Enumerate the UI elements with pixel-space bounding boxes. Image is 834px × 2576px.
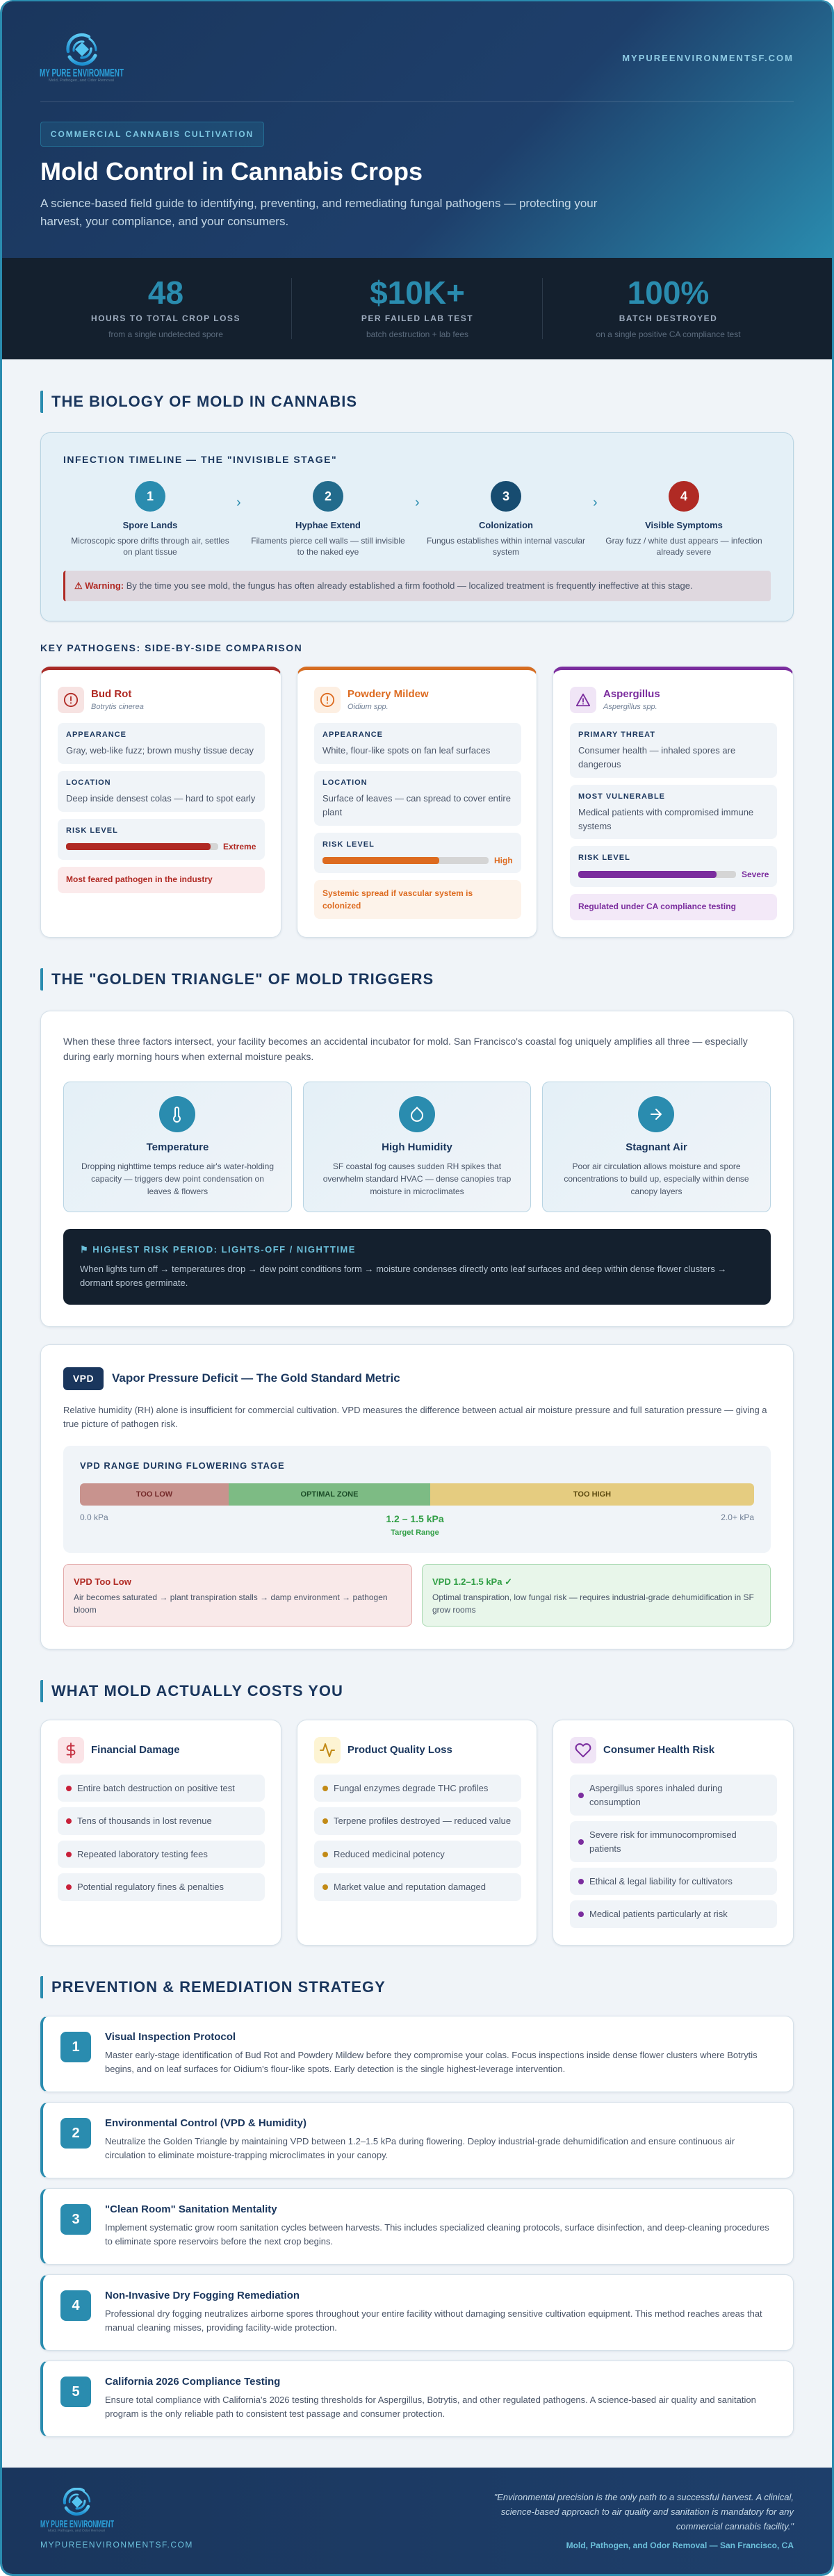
stat: $10K+: batch destruction + lab fees (366, 329, 468, 339)
range bar (80, 1483, 754, 1506)
panel: consumer health risk: Consumer Health Risk (603, 1744, 714, 1756)
vpd chart: VPD RANGE DURING FLOWERING STAGE (80, 1460, 285, 1471)
panel: financial damage: Financial Damage (91, 1744, 180, 1756)
callout: highest risk period: When lights turn off → temperatures drop → dew point conditions form → moisture condenses directly onto leaf surfaces and deep within dense flower clusters → (80, 1264, 726, 1274)
panel: financial damage: Repeated laboratory testing fees (77, 1849, 208, 1859)
step 3: system (493, 547, 519, 557)
trigger: stagnant air: Stagnant Air (626, 1141, 687, 1153)
trigger: humidity: High Humidity (382, 1141, 452, 1153)
list (570, 1775, 777, 1816)
stat: 100%: 100% (628, 275, 709, 311)
list: Aspergillus spores inhaled during (589, 1783, 723, 1793)
stat: $10K+: $10K+ (370, 275, 465, 311)
warning callout (63, 571, 771, 601)
risk level: RISK LEVEL (66, 826, 118, 835)
panel: infection timeline (40, 432, 794, 621)
icon: water drop (399, 1096, 435, 1132)
callout (58, 867, 265, 893)
icon: alert circle (314, 687, 341, 713)
step 1 (71, 481, 229, 557)
panel: golden triangle (40, 1011, 794, 1327)
risk level (314, 833, 521, 873)
strategy step 1: Master early-stage identification of Bud Rot and Powdery Mildew before they compromise your colas. Focus inspections inside dense flower clusters where Botrytis (105, 2050, 758, 2060)
trigger: temperature: Temperature (147, 1141, 208, 1153)
step 4: 4 (680, 489, 687, 503)
step 4: already severe (657, 547, 711, 557)
icon: activity (314, 1737, 341, 1763)
step 2: 2 (325, 489, 332, 503)
risk level: High (494, 856, 513, 865)
footer quote (494, 2492, 794, 2532)
heading: prevention: PREVENTION & REMEDIATION STRATEGY (51, 1978, 386, 1996)
strategy step 3: 3 (72, 2212, 80, 2227)
primary threat: dangerous (578, 759, 621, 769)
heading: golden triangle (40, 968, 596, 991)
logo (40, 33, 124, 83)
trigger: stagnant air: concentrations to build up, especially within dense (564, 1174, 749, 1184)
stat: $10K+ (361, 275, 473, 339)
icon: heart (570, 1737, 596, 1763)
range bar: OPTIMAL ZONE (301, 1490, 358, 1499)
callout: Regulated under CA compliance testing (578, 902, 736, 911)
icon: arrow (638, 1096, 674, 1132)
panel: consumer health risk: patients (589, 1843, 621, 1853)
step 2: to the naked eye (297, 547, 359, 557)
logo: Mold, Pathogen, and Odor Removal (49, 79, 114, 83)
trigger: temperature: capacity — triggers dew point condensation on (91, 1174, 264, 1184)
icon: dollar (58, 1737, 84, 1763)
step 4 (605, 481, 762, 557)
box: vpd optimal (422, 1564, 771, 1627)
intro text: When these three factors intersect, your facility becomes an accidental incubator for mold. San Francisco's coastal fog uniquely amplifies all three — especially (63, 1036, 748, 1047)
strategy step 5: program is the only reliable path to consistent test passage and consumer protection. (105, 2408, 445, 2419)
heading: biology (40, 391, 596, 413)
list (58, 1775, 265, 1802)
vpd chart: 1.2 – 1.5 kPa (386, 1513, 444, 1524)
risk level: RISK LEVEL (578, 854, 630, 862)
heading: costs (40, 1680, 596, 1702)
trigger: temperature: leaves & flowers (147, 1187, 208, 1196)
intro text (63, 1036, 748, 1062)
strategy step 1: Visual Inspection Protocol (105, 2031, 236, 2043)
step 1: Microscopic spore drifts through air, settles (71, 536, 229, 546)
strategy step 2: Neutralize the Golden Triangle by maintaining VPD between 1.2–1.5 kPa during flowering. Deploy industrial-grade dehumidification and ensure continuous air (105, 2136, 735, 2146)
strategy step 2: circulation to eliminate moisture-trapping microclimates in your canopy. (105, 2150, 388, 2160)
strategy step 3 (40, 2188, 794, 2265)
trigger: humidity: overwhelm standard HVAC — dense canopies trap (323, 1174, 511, 1184)
warning callout: ⚠ Warning: By the time you see mold, the fungus has often already established a firm foothold — localized treatment is frequently ineffective at this stage. (74, 580, 693, 591)
step 4: Gray fuzz / white dust appears — infection (605, 536, 762, 546)
heading: prevention (40, 1976, 596, 1998)
primary threat: Consumer health — inhaled spores are (578, 745, 735, 756)
risk level: Severe (742, 870, 769, 879)
vpd intro: true picture of pathogen risk. (63, 1419, 178, 1429)
stat: 100%: BATCH DESTROYED (619, 313, 717, 323)
panel: product quality loss (297, 1720, 537, 1946)
panel: bud rot (40, 667, 281, 938)
trigger: stagnant air (542, 1082, 771, 1212)
heading: costs: WHAT MOLD ACTUALLY COSTS YOU (51, 1682, 343, 1699)
panel: financial damage: Tens of thousands in lost revenue (77, 1816, 212, 1826)
arrow: › (236, 495, 241, 510)
risk level (58, 819, 265, 860)
risk level (570, 846, 777, 887)
panel: product quality loss: Product Quality Loss (348, 1744, 452, 1756)
strategy step 4 (40, 2274, 794, 2351)
location: plant (322, 806, 342, 817)
range bar: TOO LOW (136, 1490, 172, 1499)
most vulnerable: MOST VULNERABLE (578, 792, 665, 801)
footer quote: "Environmental precision is the only path to a successful harvest. A clinical, (494, 2492, 794, 2502)
name: Aspergillus (603, 688, 660, 700)
strategy step 4: Professional dry fogging neutralizes airborne spores throughout your entire facility without damaging sensitive cultivation equipment. This method reaches areas that (105, 2308, 762, 2319)
list: consumption (589, 1796, 641, 1807)
vpd chart (63, 1446, 771, 1553)
trigger: humidity: SF coastal fog causes sudden RH spikes that (333, 1161, 501, 1171)
step 4: Visible Symptoms (645, 520, 723, 530)
strategy step 2: 2 (72, 2126, 80, 2141)
strategy step 3: "Clean Room" Sanitation Mentality (105, 2203, 277, 2215)
panel: consumer health risk: Ethical & legal liability for cultivators (589, 1876, 733, 1886)
step 3: Fungus establishes within internal vascular (427, 536, 585, 546)
vpd title: Vapor Pressure Deficit — The Gold Standard Metric (112, 1371, 400, 1385)
appearance (58, 723, 265, 764)
box: vpd too low: VPD Too Low (74, 1576, 131, 1587)
appearance: APPEARANCE (322, 731, 383, 739)
panel: consumer health risk (553, 1720, 794, 1946)
panel: product quality loss: Terpene profiles destroyed — reduced value (334, 1816, 511, 1826)
location (314, 771, 521, 826)
subtitle: A science-based field guide to identifying, preventing, and remediating fungal pathogens — protecting your (40, 197, 597, 210)
callout (314, 880, 521, 919)
step 3 (427, 481, 585, 557)
title: Mold Control in Cannabis Crops (40, 157, 423, 186)
vpd badge (63, 1367, 104, 1390)
timeline title: INFECTION TIMELINE — THE "INVISIBLE STAGE" (63, 454, 337, 465)
location: Surface of leaves — can spread to cover entire (322, 793, 511, 804)
trigger: humidity: moisture in microclimates (370, 1187, 464, 1196)
vpd badge: VPD (73, 1373, 94, 1384)
trigger: stagnant air: canopy layers (630, 1187, 682, 1196)
location (58, 771, 265, 812)
risk level: RISK LEVEL (322, 840, 375, 849)
arrow: › (415, 495, 420, 510)
callout: highest risk period: ⚑ HIGHEST RISK PERIOD: LIGHTS-OFF / NIGHTTIME (80, 1244, 356, 1255)
strategy step 1: 1 (72, 2039, 80, 2055)
strategy step 5 (40, 2361, 794, 2437)
location: LOCATION (322, 778, 368, 787)
box: vpd too low: Air becomes saturated → plant transpiration stalls → damp environment → pathogen (74, 1592, 388, 1602)
header (0, 0, 834, 258)
location: LOCATION (66, 778, 111, 787)
most vulnerable: Medical patients with compromised immune (578, 807, 753, 817)
stat: 48 hours: HOURS TO TOTAL CROP LOSS (91, 313, 240, 323)
footer logo: Mold, Pathogen, and Odor Removal (48, 2529, 105, 2532)
list (314, 1775, 521, 1802)
callout: colonized (322, 901, 361, 911)
primary threat: PRIMARY THREAT (578, 731, 655, 739)
heading: biology: THE BIOLOGY OF MOLD IN CANNABIS (51, 393, 357, 410)
box: vpd too low (63, 1564, 412, 1627)
name: Bud Rot (91, 688, 131, 700)
strategy step 2: Environmental Control (VPD & Humidity) (105, 2117, 306, 2129)
vpd chart: 0.0 kPa (80, 1513, 108, 1522)
callout: highest risk period: dormant spores germinate. (80, 1278, 188, 1288)
panel: powdery mildew (297, 667, 537, 938)
step 2 (251, 481, 405, 557)
box: vpd optimal: VPD 1.2–1.5 kPa ✓ (432, 1576, 512, 1587)
subtitle: harvest, your compliance, and your consumers. (40, 215, 288, 228)
vpd chart: Target Range (391, 1529, 439, 1537)
panel: financial damage (40, 1720, 281, 1946)
stats band (0, 258, 834, 359)
strategy step 3: Implement systematic grow room sanitation cycles between harvests. This includes specialized cleaning protocols, surface disinfection, and deep-cleaning procedures (105, 2222, 769, 2233)
list: Entire batch destruction on positive test (77, 1783, 235, 1793)
strategy step 2 (40, 2102, 794, 2178)
heading: golden triangle: THE "GOLDEN TRIANGLE" OF MOLD TRIGGERS (51, 970, 434, 988)
footer quote: science-based approach to air quality and sanitation is mandatory for any (501, 2506, 794, 2517)
callout: highest risk period (63, 1229, 771, 1305)
callout: Most feared pathogen in the industry (66, 874, 213, 884)
badge (40, 122, 264, 147)
vpd intro (63, 1405, 767, 1429)
vpd intro: Relative humidity (RH) alone is insufficient for commercial cultivation. VPD measures the difference between actual air moisture pressure and full saturation pressure — giving a (63, 1405, 767, 1415)
trigger: stagnant air: Poor air circulation allows moisture and spore (572, 1161, 741, 1171)
name: Powdery Mildew (348, 688, 429, 700)
appearance: White, flour-like spots on fan leaf surfaces (322, 745, 490, 756)
arrow: › (593, 495, 598, 510)
panel: product quality loss: Market value and reputation damaged (334, 1882, 486, 1892)
panel: financial damage: Potential regulatory fines & penalties (77, 1882, 224, 1892)
appearance (314, 723, 521, 764)
step 1: Spore Lands (123, 520, 177, 530)
stat: 48 hours: 48 (148, 275, 183, 311)
panel: product quality loss: Reduced medicinal potency (334, 1849, 445, 1859)
strategy step 5: Ensure total compliance with California's 2026 testing thresholds for Aspergillus, Botrytis, and other regulated pathogens. A science-based air quality and sanitation (105, 2395, 756, 2405)
panel: consumer health risk: Severe risk for immunocompromised (589, 1829, 737, 1840)
trigger: humidity (303, 1082, 531, 1212)
panel: consumer health risk: Medical patients particularly at risk (589, 1909, 728, 1919)
step 1: 1 (147, 489, 154, 503)
stat: 100%: on a single positive CA compliance test (596, 329, 741, 339)
strategy step 1 (40, 2016, 794, 2092)
strategy step 4: 4 (72, 2298, 80, 2313)
icon: warning triangle (570, 687, 596, 713)
heading: key pathogens: KEY PATHOGENS: SIDE-BY-SIDE COMPARISON (40, 642, 302, 653)
stat: 100% (596, 275, 741, 339)
most vulnerable (570, 785, 777, 839)
most vulnerable: systems (578, 820, 612, 831)
range bar: TOO HIGH (573, 1490, 611, 1499)
step 3: 3 (502, 489, 509, 503)
appearance: Gray, web-like fuzz; brown mushy tissue decay (66, 745, 254, 756)
strategy step 4: Non-Invasive Dry Fogging Remediation (105, 2290, 300, 2301)
strategy step 4: manual cleaning misses, providing facility-wide protection. (105, 2322, 337, 2333)
badge: COMMERCIAL CANNABIS CULTIVATION (51, 129, 254, 139)
trigger: temperature (63, 1082, 292, 1212)
box: vpd optimal: Optimal transpiration, low fungal risk — requires industrial-grade dehumidification in SF (432, 1592, 754, 1602)
primary threat (570, 723, 777, 778)
step 2: Filaments pierce cell walls — still invisible (251, 536, 405, 546)
box: vpd too low: bloom (74, 1605, 97, 1615)
appearance: APPEARANCE (66, 731, 126, 739)
subtitle (40, 197, 598, 228)
stat: 48 hours (91, 275, 240, 339)
strategy step 5: California 2026 Compliance Testing (105, 2376, 280, 2388)
footer logo (40, 2488, 114, 2532)
website url: MYPUREENVIRONMENTSF.COM (622, 53, 794, 63)
footer url: MYPUREENVIRONMENTSF.COM (40, 2540, 193, 2550)
panel: bud rot: Botrytis cinerea (91, 703, 144, 711)
box: vpd optimal: grow rooms (432, 1605, 476, 1615)
step 3: Colonization (479, 520, 533, 530)
footer attribution: Mold, Pathogen, and Odor Removal — San Francisco, CA (566, 2541, 794, 2550)
strategy step 1: begins, and on leaf surfaces for Oidium's flour-like spots. Early detection is the single highest-leverage intervention. (105, 2064, 565, 2074)
step 1: on plant tissue (123, 547, 177, 557)
callout (570, 894, 777, 920)
step 2: Hyphae Extend (295, 520, 361, 530)
footer (0, 2468, 834, 2576)
stat: 48 hours: from a single undetected spore (108, 329, 223, 339)
panel: vpd (40, 1344, 794, 1649)
trigger: temperature: Dropping nighttime temps reduce air's water-holding (81, 1161, 274, 1171)
intro text: during early morning hours when external moisture peaks. (63, 1051, 313, 1062)
panel: aspergillus (553, 667, 794, 938)
icon: thermometer (159, 1096, 195, 1132)
panel: powdery mildew: Oidium spp. (348, 703, 389, 711)
stat: $10K+: PER FAILED LAB TEST (361, 313, 473, 323)
location: Deep inside densest colas — hard to spot early (66, 793, 255, 804)
callout: Systemic spread if vascular system is (322, 888, 473, 898)
icon: alert circle (58, 687, 84, 713)
panel: aspergillus: Aspergillus spp. (603, 703, 657, 711)
risk level: Extreme (223, 842, 256, 851)
vpd chart: 2.0+ kPa (721, 1513, 754, 1522)
footer quote: commercial cannabis facility." (676, 2521, 794, 2532)
list: Fungal enzymes degrade THC profiles (334, 1783, 488, 1793)
strategy step 3: to eliminate spore reservoirs before the next crop begins. (105, 2236, 333, 2247)
strategy step 5: 5 (72, 2384, 80, 2399)
